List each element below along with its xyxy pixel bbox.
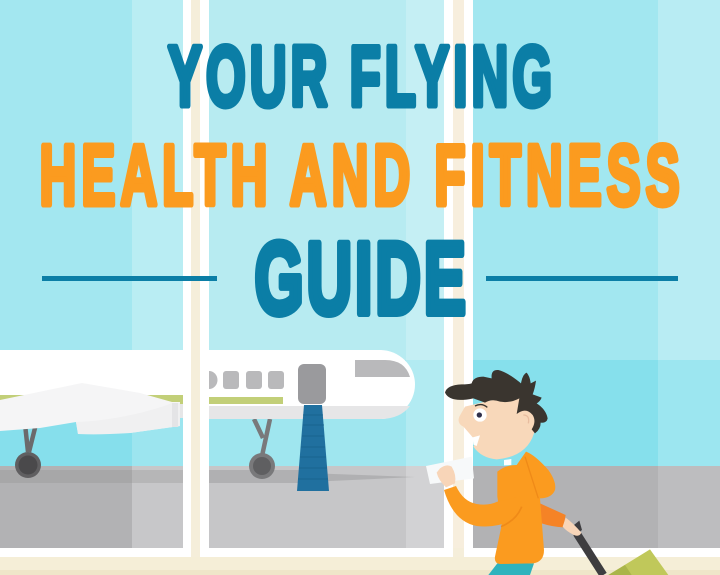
back arm bbox=[538, 503, 566, 527]
head bbox=[459, 393, 534, 459]
window pane: centre bbox=[209, 0, 444, 548]
title line: GUIDE: GUIDE bbox=[254, 221, 466, 335]
cockpit window bbox=[355, 360, 410, 377]
landing gear: front bbox=[249, 419, 275, 479]
airplane: rear section with wing bbox=[0, 350, 183, 478]
suitcase handle bbox=[577, 533, 603, 575]
ear bbox=[519, 411, 538, 429]
eye bbox=[473, 408, 487, 422]
window pane: left bbox=[0, 0, 183, 548]
fuselage: rear bbox=[0, 350, 183, 418]
passenger windows bbox=[209, 371, 284, 389]
hair bbox=[445, 370, 548, 433]
collar bbox=[504, 459, 511, 465]
suitcase bbox=[608, 549, 668, 575]
landing gear: rear bbox=[15, 424, 41, 478]
title bbox=[40, 29, 680, 335]
aircraft door bbox=[298, 364, 326, 404]
airplane: front section bbox=[209, 350, 415, 479]
front arm bbox=[444, 486, 521, 526]
body jacket with hood bbox=[495, 452, 555, 564]
rule left bbox=[42, 276, 217, 281]
title line: YOUR FLYING: YOUR FLYING bbox=[168, 29, 552, 124]
eyebrow bbox=[475, 405, 487, 407]
boarding stairs bbox=[297, 405, 329, 491]
paper bbox=[426, 457, 474, 484]
mouth bbox=[473, 435, 480, 446]
legs bbox=[488, 563, 534, 575]
traveller with suitcase bbox=[426, 370, 668, 575]
green stripe bbox=[209, 397, 283, 404]
window pane: right bbox=[473, 0, 720, 548]
title line: HEALTH AND FITNESS: HEALTH AND FITNESS bbox=[40, 128, 680, 223]
front hand bbox=[437, 465, 455, 487]
wing bbox=[0, 383, 180, 434]
back hand bbox=[563, 518, 581, 536]
rule right bbox=[486, 276, 678, 281]
fuselage: front bbox=[209, 350, 415, 419]
